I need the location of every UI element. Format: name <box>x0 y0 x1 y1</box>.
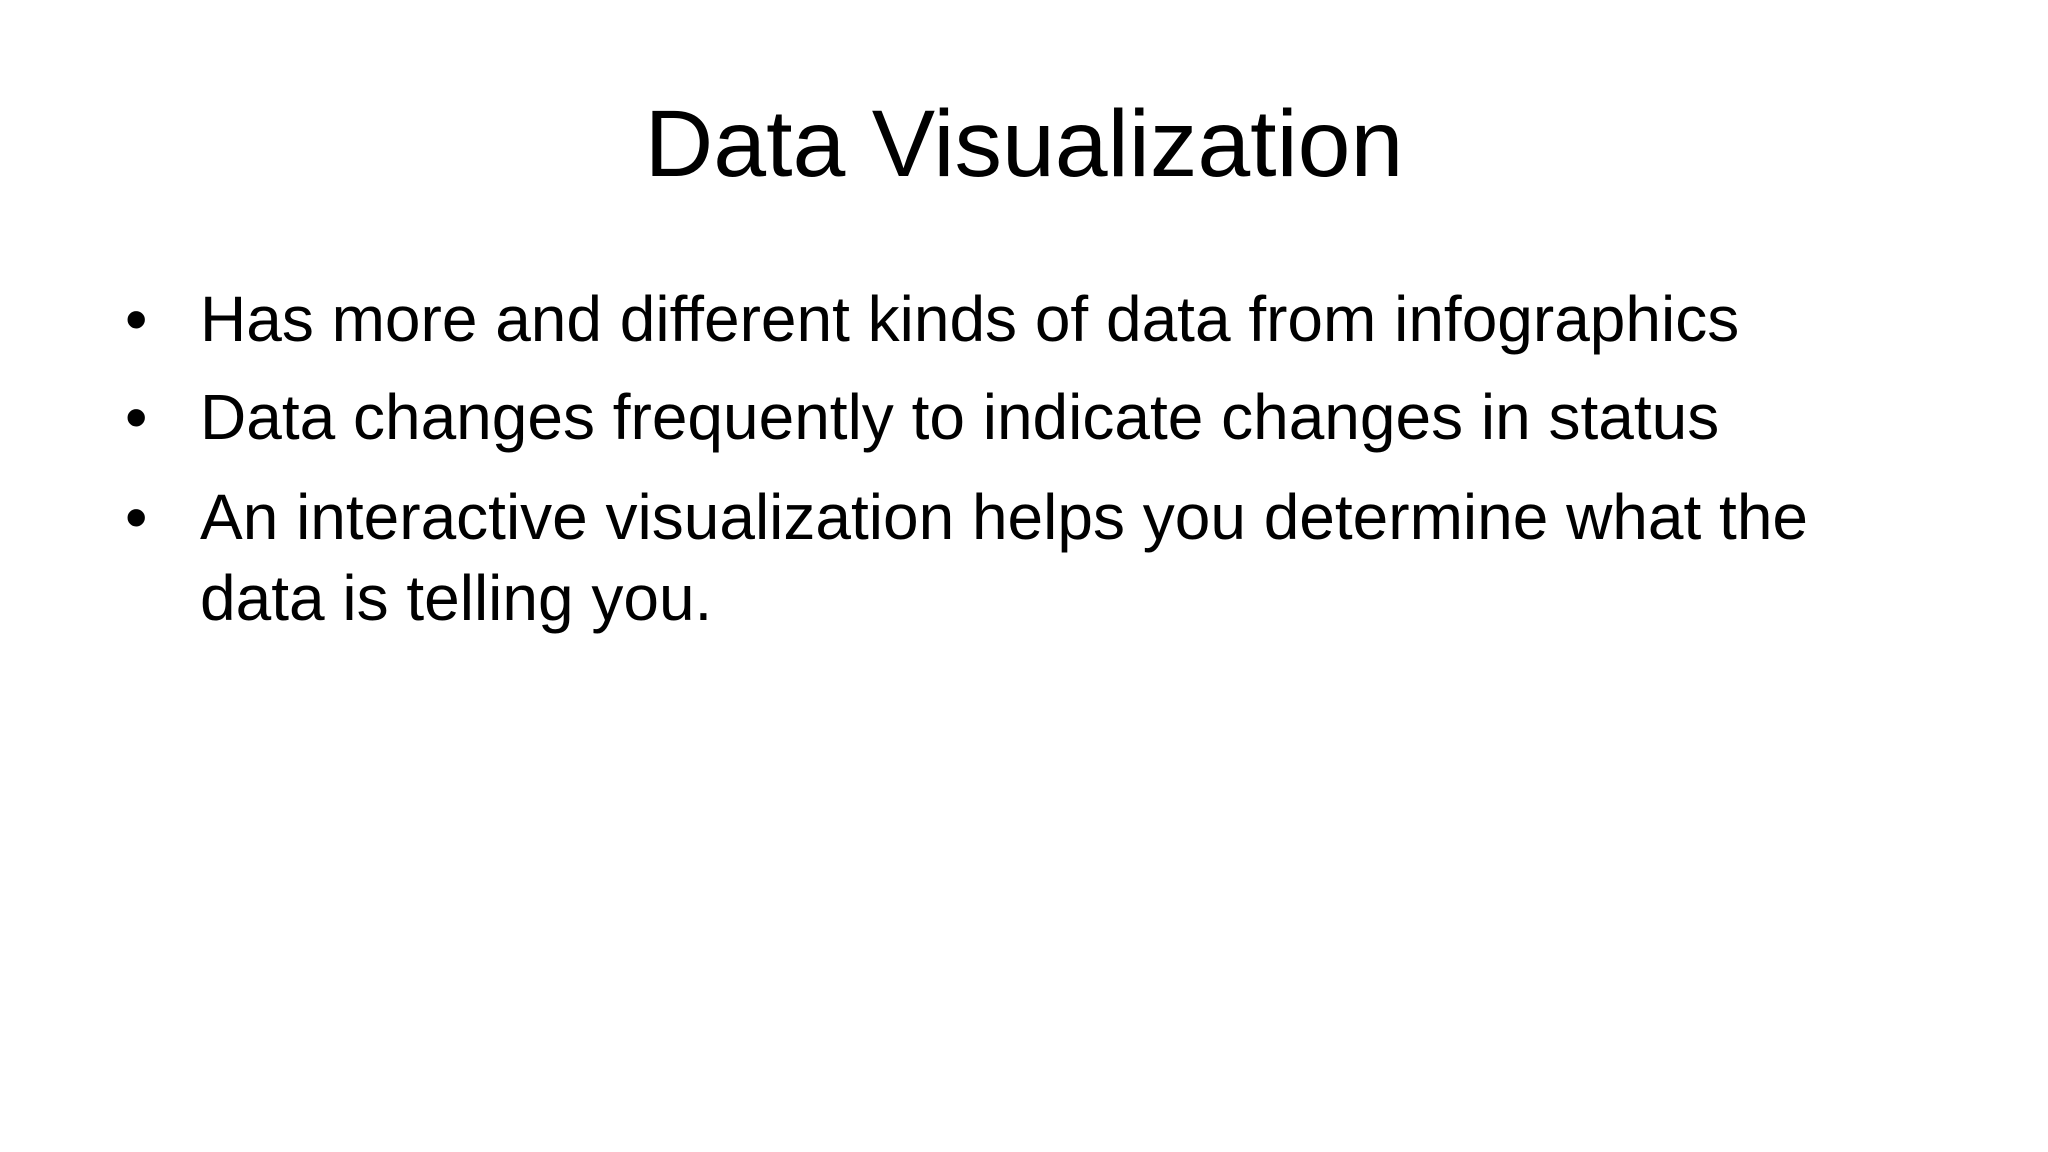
bullet 2: Data changes frequently to indicate changes in status <box>200 381 1719 453</box>
bullet list <box>125 283 1808 634</box>
bullet 1: Has more and different kinds of data from infographics <box>200 283 1739 355</box>
bullet 3: An interactive visualization helps you determine what the <box>200 481 1808 553</box>
bullet 1: • <box>125 283 147 355</box>
bullet 3: data is telling you. <box>200 562 712 634</box>
bullet 3 <box>125 481 1808 634</box>
title: Data Visualization <box>645 91 1403 197</box>
bullet 2: • <box>125 381 147 453</box>
bullet 3: • <box>125 481 147 553</box>
